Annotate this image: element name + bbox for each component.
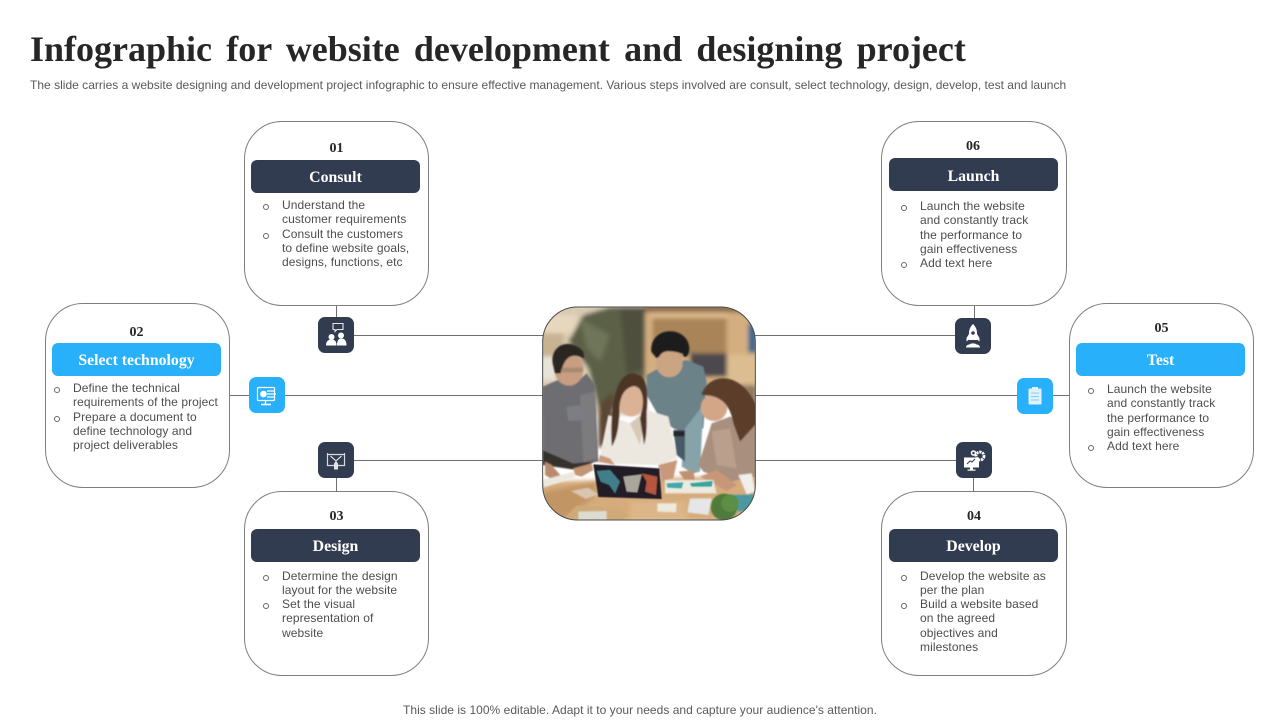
bullet list: consult: Consult the customers (282, 227, 403, 241)
bullet list: select technology: Define the technical (73, 381, 180, 395)
bullet list: select technology: requirements of the project (73, 395, 218, 409)
bullet list: select technology: Prepare a document to (73, 410, 197, 424)
icon: rocket (955, 318, 991, 354)
bullet list: launch (901, 199, 1028, 270)
bullet list: launch: Launch the website (920, 199, 1025, 213)
panel: step 01 consult (244, 121, 429, 306)
subtitle: The slide carries a website designing and development project infographic to ensure effective management. Various steps involved are consult, select technology, design, develop, test and launch (30, 78, 1066, 92)
step number 02: 02 (130, 324, 144, 340)
heading: design (251, 529, 420, 562)
bullet list: develop (901, 568, 1046, 654)
bullet list: test: and constantly track (1107, 396, 1215, 410)
bullet list: launch: and constantly track (920, 213, 1028, 227)
bullet list: consult: Understand the (282, 198, 365, 212)
bullet list: design: Set the visual (282, 597, 355, 611)
central photo: team around a laptop (542, 306, 756, 520)
bullet list: test: gain effectiveness (1107, 425, 1204, 439)
bullet list: select technology: define technology and (73, 424, 192, 438)
bullet list: develop: Build a website based (920, 597, 1038, 611)
bullet list: test (1088, 382, 1216, 453)
bullet list: design: representation of (282, 611, 373, 625)
panel: step 05 test (1069, 303, 1254, 488)
bullet list: select technology: project deliverables (73, 438, 178, 452)
panel: step 06 launch (881, 121, 1067, 306)
icon: people in discussion (318, 317, 354, 353)
bullet list: test: Launch the website (1107, 382, 1212, 396)
bullet list: design: layout for the website (282, 583, 397, 597)
bullet list: consult: customer requirements (282, 212, 406, 226)
step number 05: 05 (1154, 321, 1168, 336)
heading: consult: Consult (309, 169, 362, 186)
heading: consult (251, 160, 420, 193)
bullet list: design (263, 568, 398, 640)
bullet list: launch: the performance to (920, 228, 1022, 242)
step number 03: 03 (330, 509, 344, 524)
bullet list: launch: gain effectiveness (920, 242, 1017, 256)
heading: launch (889, 158, 1058, 191)
panel: step 02 select technology (45, 303, 230, 488)
heading: develop (889, 529, 1058, 562)
heading: test (1076, 343, 1245, 376)
bullet list: develop: objectives and (920, 626, 998, 640)
heading: test: Test (1147, 352, 1174, 369)
bullet list: consult (263, 198, 409, 269)
bullet list: test: Add text here (1107, 439, 1179, 453)
bullet list: develop: Develop the website as (920, 568, 1046, 582)
bullet list: select technology (54, 381, 218, 452)
bullet list: design: Determine the design (282, 568, 398, 582)
bullet list: consult: designs, functions, etc (282, 255, 403, 269)
heading: select technology: Select technology (78, 352, 195, 369)
title: Infographic for website development and designing project (30, 29, 966, 69)
footer note: This slide is 100% editable. Adapt it to your needs and capture your audience's attention. (403, 703, 877, 717)
step number 01: 01 (330, 140, 344, 156)
bullet list: consult: to define website goals, (282, 241, 409, 255)
bullet list: develop: on the agreed (920, 611, 995, 625)
step number 06: 06 (966, 139, 980, 154)
heading: launch: Launch (948, 168, 999, 185)
icon: code monitor with gears (956, 442, 992, 478)
heading: design: Design (313, 538, 358, 555)
bullet list: test: the performance to (1107, 411, 1209, 425)
bullet list: design: website (282, 626, 323, 640)
icon: clipboard (1017, 378, 1053, 414)
step number 04: 04 (967, 509, 981, 524)
panel: step 03 design (244, 491, 429, 676)
heading: develop: Develop (946, 538, 1001, 555)
bullet list: launch: Add text here (920, 256, 992, 270)
bullet list: develop: per the plan (920, 583, 984, 597)
panel: step 04 develop (881, 491, 1067, 676)
icon: monitor with gear (249, 377, 285, 413)
heading: select technology (52, 343, 221, 376)
icon: design display (318, 442, 354, 478)
bullet list: develop: milestones (920, 640, 978, 654)
